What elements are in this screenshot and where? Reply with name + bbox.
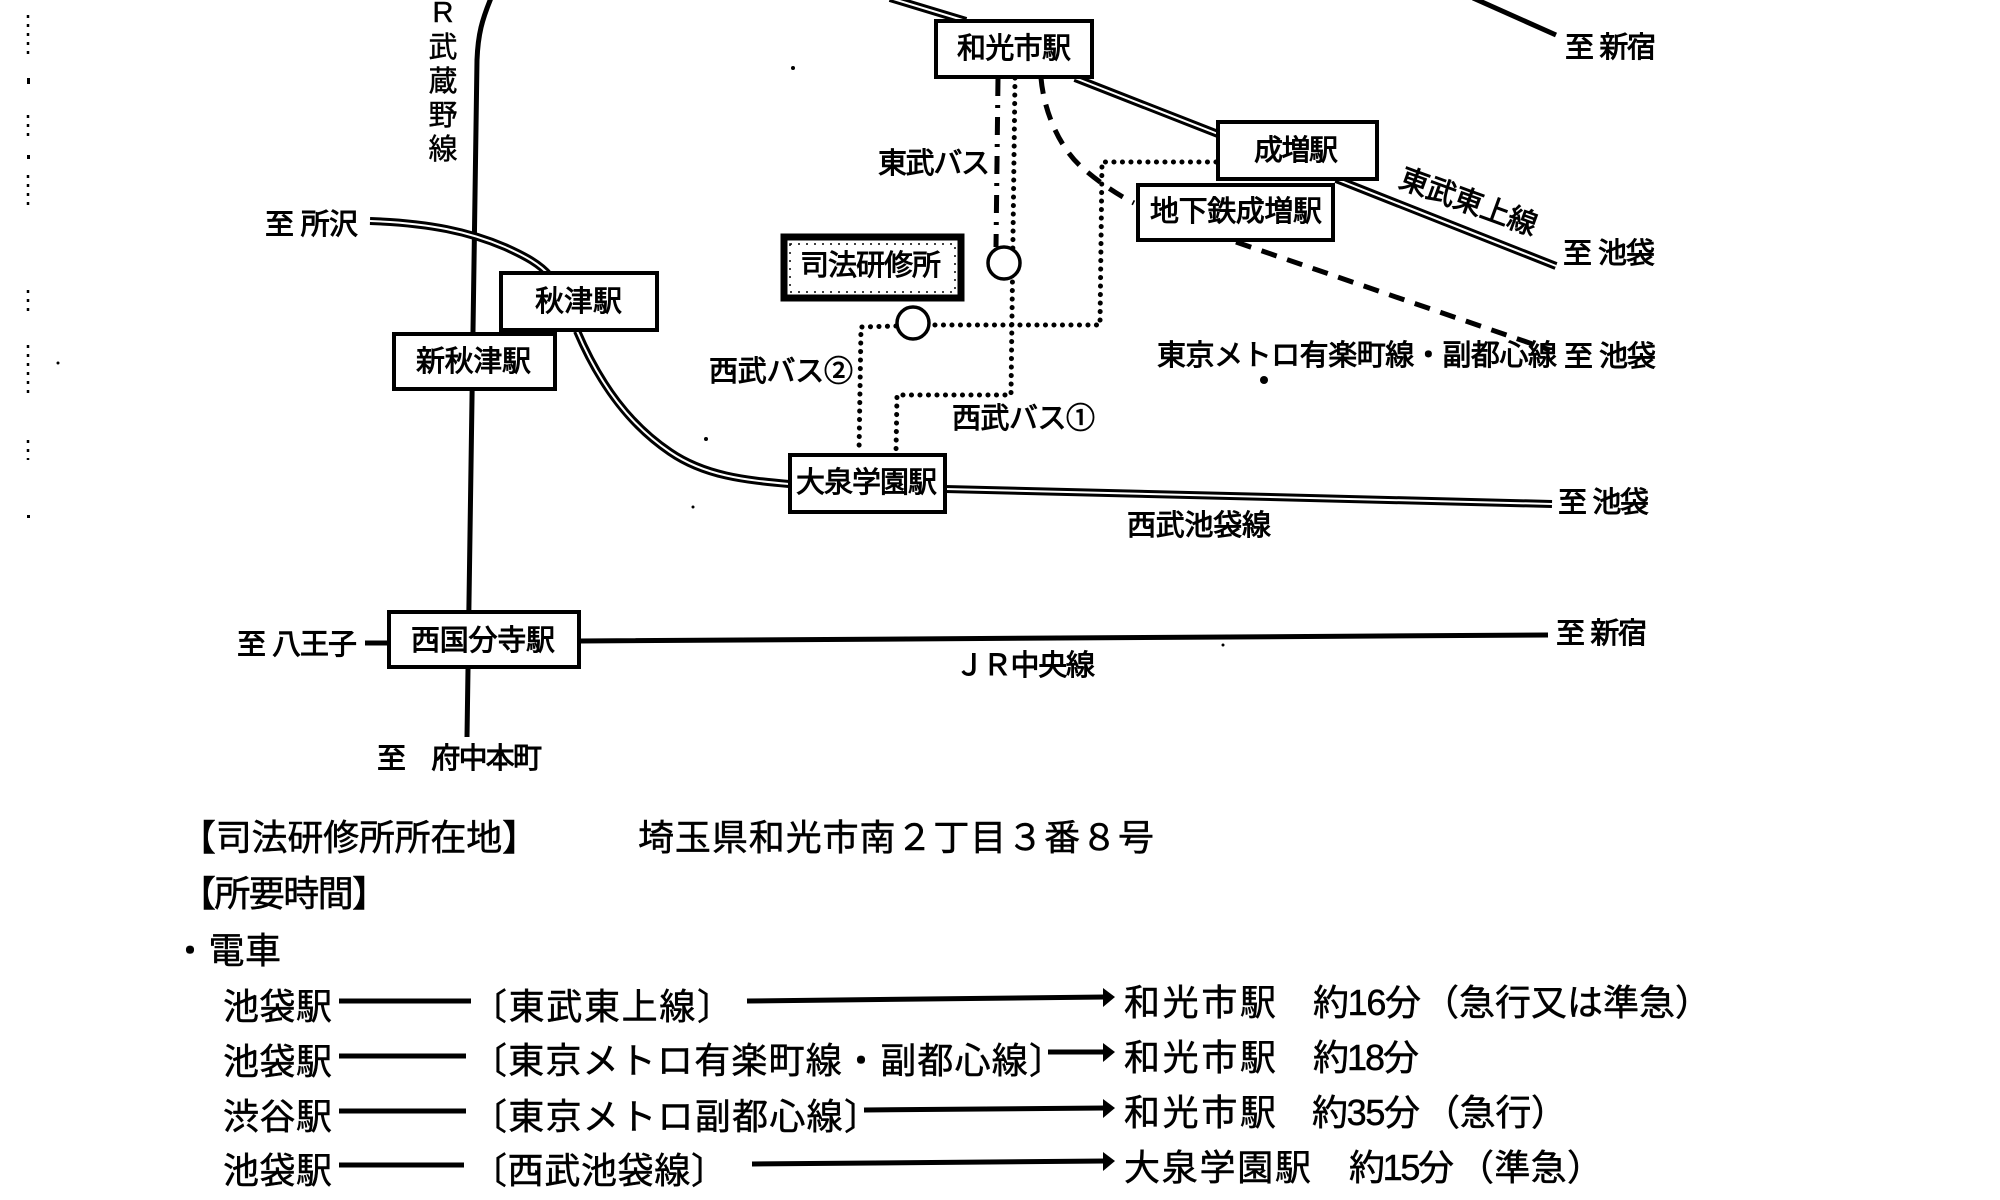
station: 西国分寺駅: 西国分寺駅: [411, 625, 555, 657]
station: 地下鉄成増駅: 地下鉄成増駅: [1150, 195, 1322, 228]
bus stop: upper circle: [988, 247, 1020, 279]
line: JR Chuo: [365, 635, 1548, 643]
destination: Fuchuhommachi: 至 府中本町: [377, 742, 542, 775]
station: 和光市駅: 和光市駅: [957, 32, 1071, 65]
label: JR Musashino line: 線: [428, 133, 458, 166]
destination: Ikebukuro Seibu: 至 池袋: [1558, 486, 1649, 519]
bullet: train: ・電車: [172, 930, 281, 971]
station: 西国分寺駅: [389, 612, 579, 667]
row: Shibuya Fukutoshin: 〔東京メトロ副都心線〕: [471, 1096, 880, 1137]
label: Tobu bus: 東武バス: [878, 147, 990, 180]
label: JR Musashino line: [428, 0, 458, 166]
row: Ikebukuro Seibu: 〔西武池袋線〕: [471, 1150, 727, 1191]
landmark: 司法研修所: 司法研修所: [800, 249, 941, 282]
row: Shibuya Fukutoshin: （急行）: [1424, 1092, 1567, 1133]
row: Ikebukuro Tokyo Metro: 〔東京メトロ有楽町線・副都心線〕: [471, 1040, 1065, 1081]
row: Ikebukuro Tobu Tojo: 池袋駅: [223, 986, 332, 1027]
row: Ikebukuro Tokyo Metro: [223, 1037, 1419, 1082]
destination: Tokorozawa: 至 所沢: [265, 208, 358, 241]
destination: Shinjuku top: 至 新宿: [1565, 31, 1656, 64]
station: 成増駅: [1218, 122, 1377, 179]
train table: [223, 982, 1711, 1191]
row: Ikebukuro Seibu: 大泉学園駅: [1124, 1147, 1311, 1188]
heading: location: 【司法研修所所在地】: [180, 817, 538, 858]
address block: [172, 817, 1154, 971]
station: 成増駅: 成増駅: [1254, 134, 1338, 167]
bus route: Tobu bus: [996, 78, 998, 247]
row: Ikebukuro Seibu: （準急）: [1458, 1147, 1603, 1188]
label: JR Musashino line: 武: [428, 32, 458, 64]
row: Shibuya Fukutoshin: [223, 1092, 1567, 1137]
row: Shibuya Fukutoshin: 約35分: [1312, 1092, 1420, 1133]
station: 新秋津駅: 新秋津駅: [416, 345, 531, 378]
line: to Shinjuku top right: [1473, 0, 1556, 35]
route map: [237, 0, 1656, 775]
row: Shibuya Fukutoshin: 和光市駅: [1124, 1092, 1276, 1133]
label: JR Musashino line: 野: [428, 100, 458, 132]
label: Seibu bus 2: 西武バス②: [709, 356, 853, 388]
label: Seibu bus 1: 西武バス①: [952, 403, 1095, 435]
row: Ikebukuro Tobu Tojo: 〔東武東上線〕: [471, 986, 733, 1027]
bus route: Seibu bus 1: [896, 78, 1015, 452]
landmark: 司法研修所: [784, 237, 961, 298]
label: JR Musashino line: 蔵: [428, 65, 458, 98]
station: 新秋津駅: [394, 334, 555, 389]
station: 秋津駅: [501, 273, 657, 330]
row: Ikebukuro Tokyo Metro: 池袋駅: [223, 1041, 332, 1082]
destination: Hachioji: 至 八王子: [237, 629, 357, 661]
destination: Ikebukuro Metro: 至 池袋: [1564, 340, 1656, 373]
row: Ikebukuro Tokyo Metro: 約18分: [1313, 1037, 1419, 1078]
label: Seibu Ikebukuro line: 西武池袋線: [1127, 509, 1271, 542]
row: Ikebukuro Seibu: [223, 1147, 1603, 1191]
scan specks: [27, 15, 1268, 646]
row: Shibuya Fukutoshin: 渋谷駅: [223, 1096, 332, 1137]
row: Ikebukuro Tobu Tojo: [223, 982, 1711, 1027]
station: 大泉学園駅: 大泉学園駅: [796, 466, 937, 499]
station: 秋津駅: 秋津駅: [535, 285, 622, 318]
destination: Shinjuku Chuo: 至 新宿: [1556, 617, 1647, 650]
line: Seibu Ikebukuro: [370, 221, 1552, 504]
row: Ikebukuro Tobu Tojo: （急行又は準急）: [1423, 982, 1711, 1023]
bus route: Seibu bus 2: [859, 162, 1216, 453]
station: 和光市駅: [936, 21, 1092, 77]
label: JR Chuo line: ＪＲ中央線: [955, 649, 1095, 682]
row: Ikebukuro Tokyo Metro: 和光市駅: [1124, 1037, 1276, 1078]
bus stop: lower circle: [897, 307, 929, 339]
line: Tokyo Metro dashed: [1041, 78, 1550, 350]
row: Ikebukuro Tobu Tojo: 和光市駅: [1124, 982, 1276, 1023]
line: Tobu Tojo: [890, 0, 1556, 266]
address text: 埼玉県和光市南２丁目３番８号: [638, 817, 1154, 858]
line: JR Musashino: [467, 0, 491, 737]
row: Ikebukuro Tobu Tojo: 約16分: [1313, 982, 1421, 1023]
row: Ikebukuro Seibu: 池袋駅: [223, 1150, 332, 1191]
row: Ikebukuro Seibu: 約15分: [1349, 1147, 1454, 1188]
heading: required time: 【所要時間】: [180, 873, 388, 914]
label: Tobu Tojo line: 東武東上線: [1395, 162, 1542, 242]
label: Tokyo Metro lines: 東京メトロ有楽町線・副都心線: [1157, 339, 1557, 372]
station: 地下鉄成増駅: [1138, 185, 1333, 240]
station: 大泉学園駅: [790, 455, 945, 512]
destination: Ikebukuro Tobu: 至 池袋: [1563, 237, 1655, 270]
